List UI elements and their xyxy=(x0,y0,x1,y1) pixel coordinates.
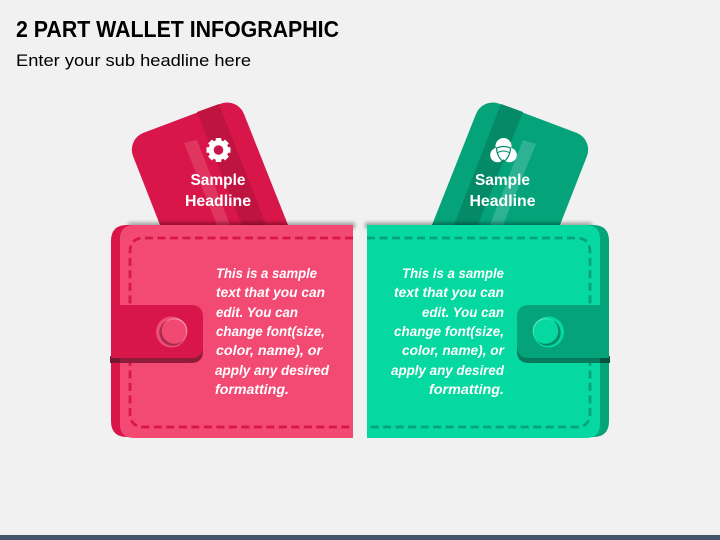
right body text: edit. You can xyxy=(422,304,504,320)
right card xyxy=(432,102,588,225)
right body text: formatting. xyxy=(429,381,504,397)
left body text: formatting. xyxy=(215,381,289,397)
left strap xyxy=(110,305,203,363)
icon: three overlapping circles xyxy=(490,138,517,162)
icon: gear xyxy=(206,138,230,162)
right body text: apply any desired xyxy=(391,362,504,378)
left button xyxy=(156,316,187,348)
left body text: This is a sample xyxy=(216,265,317,281)
card headline: Sample xyxy=(190,172,246,189)
card headline: Sample xyxy=(475,172,530,189)
left card xyxy=(132,102,288,225)
panel: right wallet xyxy=(365,102,610,438)
panel: left wallet xyxy=(110,102,355,438)
right button xyxy=(533,316,564,348)
right body text: change font(size, xyxy=(394,323,504,339)
title: 2 PART WALLET INFOGRAPHIC xyxy=(16,16,339,42)
left body text: edit. You can xyxy=(216,304,298,320)
card headline: Headline xyxy=(470,193,536,210)
left body text xyxy=(215,265,329,397)
subtitle: Enter your sub headline here xyxy=(16,51,251,70)
left body text: text that you can xyxy=(216,284,325,300)
bottom bar xyxy=(0,535,720,540)
left body text: apply any desired xyxy=(215,362,329,378)
right body text: color, name), or xyxy=(402,342,506,358)
right body text: text that you can xyxy=(394,284,504,300)
left body text: change font(size, xyxy=(216,323,325,339)
right body text: This is a sample xyxy=(402,265,504,281)
card headline: Headline xyxy=(185,193,251,210)
right strap xyxy=(517,305,610,363)
right body text xyxy=(391,265,506,397)
card headline xyxy=(185,172,251,210)
card headline xyxy=(470,172,536,210)
left body text: color, name), or xyxy=(216,342,324,358)
